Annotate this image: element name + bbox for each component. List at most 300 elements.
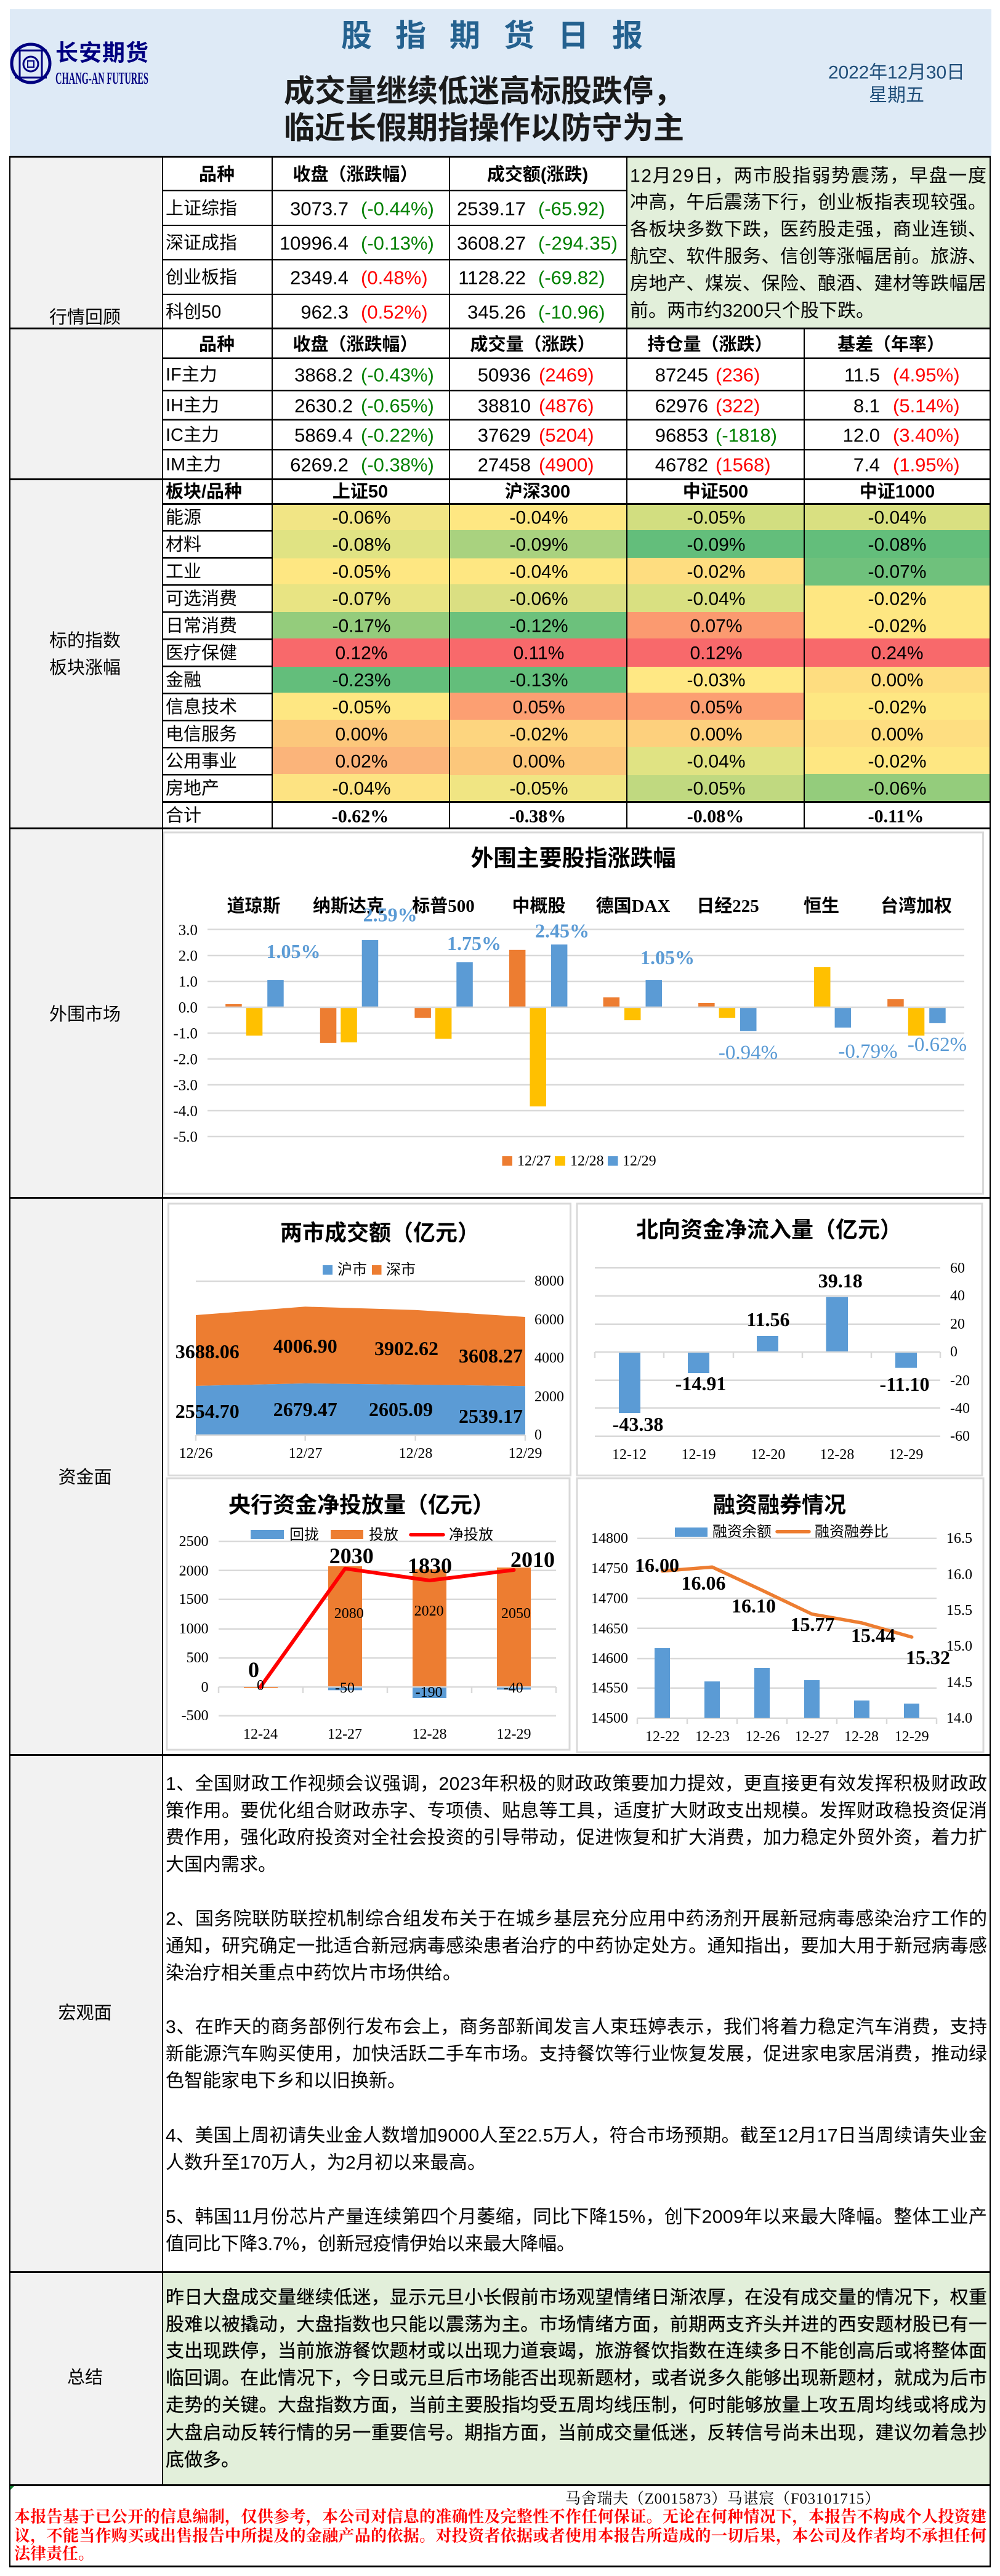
disclaimer: 本报告基于已公开的信息编制，仅供参考，本公司对信息的准确性及完整性不作任何保证。无论在何种情况下，本报告不构成个人投资建 (14, 2507, 986, 2527)
row: 创业板指: 创业板指 (166, 267, 237, 288)
row labels: sectors: 日常消费 (166, 616, 237, 636)
sector values: -0.02% (868, 589, 927, 610)
header row: futures: 持仓量（涨跌） (647, 334, 773, 355)
category labels: 中概股 (512, 896, 566, 916)
sector values: -0.06% (509, 589, 568, 610)
row: IH: (4876) (539, 395, 594, 416)
sector heat table (166, 481, 990, 826)
logo: Chang-An Futures (12, 41, 148, 87)
chart: northbound net inflow (577, 1204, 982, 1475)
axis labels: 12-27 (795, 1729, 829, 1745)
y axis labels: 1.0 (179, 974, 198, 990)
row: IF: (4.95%) (893, 364, 960, 385)
header row: spot: 品种 (199, 164, 235, 185)
data labels: 15.44 (851, 1624, 895, 1646)
row: IM: 7.4 (853, 454, 880, 475)
macro item 1: 1、全国财政工作视频会议强调，2023年积极的财政政策要加力提效，更直接更有效发挥积极财政政 (166, 1774, 987, 1794)
row: 上证综指: (-65.92) (538, 198, 605, 219)
axis labels (179, 1273, 564, 1462)
sector values: -0.05% (332, 697, 391, 718)
row labels: sectors: 可选消费 (166, 589, 237, 609)
axis labels: 4000 (534, 1350, 564, 1366)
left label column background (10, 156, 163, 2485)
data labels: 16.00 (635, 1554, 679, 1576)
date: 2022年12月30日 (828, 63, 965, 83)
data labels: 2554.70 (175, 1400, 240, 1422)
chart title: 两市成交额（亿元） (280, 1220, 480, 1245)
axis labels (612, 1260, 970, 1463)
row: 科创50: (-10.96) (538, 302, 605, 323)
axis labels: 40 (950, 1288, 965, 1304)
axis labels: 12-28 (413, 1726, 447, 1742)
axis labels: 2000 (179, 1563, 209, 1579)
legend: 12/27 (517, 1153, 551, 1169)
axis labels: 12-29 (496, 1726, 531, 1742)
sector values: -0.13% (509, 670, 568, 691)
sector values: 0.00% (871, 724, 924, 745)
area: Shenzhen (196, 1306, 525, 1386)
row: IM: (-0.38%) (361, 454, 434, 475)
section label: overseas markets: 外围市场 (49, 1004, 121, 1024)
axis labels: 8000 (534, 1273, 564, 1289)
axis labels: -500 (182, 1708, 209, 1724)
axis labels: 14500 (591, 1710, 628, 1726)
bars (244, 1566, 531, 1698)
section label: funds: 资金面 (58, 1467, 112, 1487)
logo: Chang-An Futures: 长安期货 (55, 41, 148, 65)
bars 12/27 (225, 950, 904, 1043)
bar labels: 2050 (501, 1606, 531, 1622)
area: Shanghai (196, 1383, 525, 1435)
row: IM: IM主力 (166, 454, 221, 475)
legend: 融资余额 (712, 1523, 772, 1540)
summary text: 走势的关键。大盘指数方面，当前主要股指均受五周均线压制，何时能够放量上攻五周均线或将成为 (166, 2395, 987, 2416)
axis labels: 12-29 (895, 1729, 929, 1745)
axis labels: 0 (534, 1427, 542, 1443)
totals row: -0.62% (332, 807, 389, 826)
futures table (166, 334, 960, 475)
data labels: 3902.62 (374, 1337, 438, 1359)
row labels: sectors: 能源 (166, 507, 201, 528)
macro item 4 (166, 2125, 987, 2173)
macro item 2: 2、国务院联防联控机制综合组发布关于在城乡基层充分应用中药汤剂开展新冠病毒感染治疗工作的 (166, 1909, 987, 1930)
row: IM: 46782 (655, 454, 708, 475)
sector values: 0.00% (690, 724, 743, 745)
macro item 2: 染治疗相关重点中药饮片市场供给。 (166, 1963, 461, 1984)
sector values: -0.04% (868, 507, 927, 528)
header row: futures: 收盘（涨跌幅） (292, 334, 418, 355)
row: 上证综指: 2539.17 (457, 198, 526, 219)
summary box (163, 2272, 990, 2484)
axis labels: 12/28 (399, 1446, 432, 1462)
sector values: -0.12% (509, 616, 568, 637)
chart title: 外围主要股指涨跌幅 (470, 846, 676, 871)
header row: sectors: 沪深300 (505, 481, 570, 502)
sector values: -0.04% (509, 507, 568, 528)
row: 深证成指 (166, 233, 618, 254)
macro text block (166, 1774, 987, 2255)
legend: 深市 (386, 1262, 416, 1278)
legend (502, 1153, 656, 1169)
y axis labels (173, 922, 198, 1145)
sector values: -0.08% (868, 534, 927, 555)
sector values: -0.06% (332, 507, 391, 528)
value labels 12/29: 1.75% (447, 932, 501, 954)
row: 创业板指: (0.48%) (361, 267, 428, 288)
header row: spot (199, 164, 588, 185)
header row: spot: 收盘（涨跌幅） (292, 164, 418, 185)
macro item 3: 色智能家电下乡和以旧换新。 (166, 2071, 406, 2091)
row: 深证成指: 10996.4 (280, 233, 349, 254)
data labels (613, 1270, 929, 1435)
sector values: 0.24% (871, 643, 924, 664)
sector values (332, 507, 927, 799)
bars 12/29 (267, 940, 946, 1031)
chart: PBOC net injection (167, 1478, 570, 1750)
sector values: 0.00% (335, 724, 388, 745)
axis labels: 12-27 (328, 1726, 362, 1742)
spot index table (166, 164, 618, 323)
row: IC: 12.0 (843, 425, 880, 446)
chart title: 融资融券情况 (713, 1492, 846, 1517)
legend: 沪市 (337, 1262, 367, 1278)
sector values: -0.06% (868, 778, 927, 799)
header row: sectors: 中证500 (683, 481, 748, 502)
macro item 5 (166, 2207, 987, 2255)
axis labels: 500 (187, 1650, 209, 1666)
section label: summary: 总结 (67, 2367, 103, 2388)
row: IM: 6269.2 (290, 454, 349, 475)
category labels: 日经225 (696, 896, 759, 916)
disclaimer: 议，不能当作购买或出售报告中所提及的金融产品的依据。对投资者依据或者使用本报告所造成的一切后果，本公司及作者均不承担任何 (14, 2527, 986, 2545)
headline: 临近长假期指操作以防守为主 (284, 111, 684, 145)
logo: Chang-An Futures: CHANG-AN FUTURES (55, 69, 148, 87)
data labels: 4006.90 (273, 1335, 337, 1357)
row labels: sectors: 医疗保健 (166, 643, 237, 663)
data labels: -43.38 (613, 1413, 663, 1435)
row: IC (166, 425, 960, 446)
bar labels: -50 (335, 1680, 355, 1696)
axis labels: 2500 (179, 1534, 209, 1550)
sector values: -0.05% (332, 561, 391, 582)
row: 创业板指: (-69.82) (538, 267, 605, 288)
axis labels: 60 (950, 1260, 965, 1276)
chart: overseas index moves (164, 832, 983, 1194)
summary text (166, 2288, 987, 2470)
data labels: 3608.27 (459, 1345, 523, 1367)
axis labels: 15.5 (946, 1603, 972, 1619)
row: 上证综指: (-0.44%) (361, 198, 434, 219)
data labels: 3688.06 (175, 1340, 240, 1362)
date: 星期五 (869, 85, 924, 106)
sector values: -0.08% (332, 534, 391, 555)
summary text: 临回调。在此情况下，今日或元旦后市场能否出现新题材，或者说多久能够出现新题材，就成为后市 (166, 2368, 987, 2389)
sector values: -0.05% (509, 778, 568, 799)
row: IF: 87245 (655, 364, 708, 385)
net labels: 2030 (329, 1544, 374, 1568)
axis labels: 14600 (591, 1651, 628, 1667)
macro item 1: 策作用。要优化组合财政赤字、专项债、贴息等工具，适度扩大财政支出规模。发挥财政稳投资促消 (166, 1801, 987, 1821)
axis labels: 15.0 (946, 1638, 972, 1654)
row: IC: (-0.22%) (361, 425, 434, 446)
sector values: -0.04% (332, 778, 391, 799)
row: 科创50: 科创50 (166, 302, 221, 322)
row: 科创50: 345.26 (467, 302, 526, 323)
row: IF: 50936 (478, 364, 531, 385)
bar labels: -40 (504, 1680, 523, 1696)
macro item 5: 值同比下降3.7%，创新冠疫情伊始以来最大降幅。 (166, 2234, 575, 2255)
macro item 5: 5、韩国11月份芯片产量连续第四个月萎缩，同比下降15%，创下2009年以来最大降幅。整体工业产 (166, 2207, 987, 2228)
axis labels: 2000 (534, 1389, 564, 1405)
chart title: 北向资金净流入量（亿元） (636, 1217, 902, 1242)
row: IC: 96853 (655, 425, 708, 446)
row: IF: (236) (716, 364, 760, 385)
y axis labels: 0.0 (179, 1000, 198, 1016)
summary text: 大盘启动反转行情的另一重要信号。期指方面，当前成交量低迷，反转信号尚未出现，建议勿着急抄 (166, 2423, 987, 2443)
axis labels: 14650 (591, 1621, 628, 1637)
row: IH: 2630.2 (294, 395, 353, 416)
macro item 2: 通知，研究确定一批适合新冠病毒感染患者治疗的中药协定处方。通知指出，要加大用于新冠病毒感 (166, 1936, 987, 1957)
row: IH: 62976 (655, 395, 708, 416)
bar labels: 0 (257, 1678, 264, 1694)
net labels: 1830 (408, 1553, 452, 1578)
sector values: 0.05% (512, 697, 565, 718)
data labels: 39.18 (818, 1270, 863, 1292)
axis labels: 16.0 (946, 1567, 972, 1583)
y axis labels: -5.0 (173, 1129, 198, 1145)
summary text: 昨日大盘成交量继续低迷，显示元旦小长假前市场观望情绪日渐浓厚，在没有成交量的情况下，权重 (166, 2288, 987, 2308)
y axis labels: 2.0 (179, 948, 198, 964)
row: 深证成指: 深证成指 (166, 233, 237, 253)
axis labels: 14800 (591, 1531, 628, 1547)
row: IH (166, 395, 960, 416)
chart: margin financing (577, 1478, 983, 1752)
sector values: 0.12% (690, 643, 743, 664)
row labels: sectors: 公用事业 (166, 751, 237, 771)
axis labels: 12-22 (645, 1729, 680, 1745)
data labels: 16.06 (681, 1572, 725, 1594)
disclaimer (14, 2507, 986, 2562)
market commentary box: 各板块多数下跌，医药股走强，商业连锁、 (630, 219, 986, 240)
sector values: 0.11% (514, 643, 564, 664)
sector values: -0.09% (509, 534, 568, 555)
row: IM: 27458 (478, 454, 531, 475)
row: IM: (4900) (539, 454, 594, 475)
category labels: 道琼斯 (227, 896, 281, 916)
row: IM (166, 454, 960, 475)
data labels: 2605.09 (369, 1398, 433, 1420)
net labels (248, 1544, 555, 1682)
axis labels: 12-23 (695, 1729, 730, 1745)
row: IC: 5869.4 (294, 425, 353, 446)
headline: 成交量继续低迷高标股跌停， (284, 74, 684, 108)
row labels: sectors: 材料 (166, 534, 201, 555)
axis labels: 6000 (534, 1312, 564, 1328)
data labels: 11.56 (746, 1308, 790, 1330)
sector values: -0.09% (687, 534, 746, 555)
sector values: -0.02% (687, 561, 746, 582)
axis labels: 12-20 (751, 1447, 785, 1463)
value labels 12/29: 1.05% (640, 946, 695, 968)
heat map cells (272, 504, 990, 802)
axis labels: 12-26 (745, 1729, 780, 1745)
axis labels: 0 (201, 1680, 209, 1696)
sector values: 0.07% (690, 616, 743, 637)
y axis labels: -2.0 (173, 1052, 198, 1068)
macro item 2 (166, 1909, 987, 1984)
sector values: -0.02% (868, 616, 927, 637)
data labels: 2539.17 (459, 1405, 523, 1427)
date (828, 63, 965, 106)
legend (675, 1523, 889, 1540)
sector values: -0.05% (687, 507, 746, 528)
macro item 1: 大国内需求。 (166, 1854, 276, 1875)
axis labels: -60 (950, 1428, 970, 1444)
headline (284, 74, 684, 145)
axis labels: 12-28 (820, 1447, 854, 1463)
row: IF: IF主力 (166, 364, 217, 385)
axis labels: 0 (950, 1344, 958, 1360)
row labels: sectors (166, 507, 237, 826)
macro item 4: 人数升至170万人，为2月初以来最高。 (166, 2152, 486, 2173)
bar labels: 2080 (334, 1606, 364, 1622)
sector values: -0.02% (868, 697, 927, 718)
axis labels: 1500 (179, 1592, 209, 1608)
axis labels: 14550 (591, 1680, 628, 1696)
header row: futures: 品种 (199, 334, 235, 355)
sector values: 0.12% (335, 643, 388, 664)
value labels 12/29: 1.05% (266, 940, 320, 962)
section label: macro: 宏观面 (58, 2003, 112, 2023)
row: IC: IC主力 (166, 425, 219, 445)
header row: sectors: 板块/品种 (166, 481, 242, 502)
sector values: -0.04% (509, 561, 568, 582)
header row: sectors: 中证1000 (860, 481, 935, 502)
axis labels (591, 1531, 972, 1745)
sector values: -0.04% (687, 751, 746, 772)
legend: 回拢 (289, 1527, 319, 1543)
row labels: sectors: 合计 (166, 805, 201, 826)
row: IH: 8.1 (853, 395, 880, 416)
row labels: sectors: 金融 (166, 670, 201, 690)
legend: 融资融券比 (815, 1523, 889, 1540)
macro item 4: 4、美国上周初请失业金人数增加9000人至22.5万人，符合市场预期。截至12月17日当周续请失业金 (166, 2125, 987, 2146)
axis labels: 12/29 (509, 1446, 542, 1462)
axis labels: 12-28 (844, 1729, 879, 1745)
summary text: 股难以被撬动，大盘指数也只能以震荡为主。市场情绪方面，前期两支齐头并进的西安题材股已有一 (166, 2315, 987, 2335)
row: IH: IH主力 (166, 395, 219, 416)
sector values: 0.02% (335, 751, 388, 772)
data labels: -11.10 (880, 1373, 929, 1395)
category labels: 台湾加权 (881, 895, 952, 916)
legend: 12/28 (570, 1153, 604, 1169)
legend: 投放 (369, 1527, 398, 1543)
axis labels: 14700 (591, 1591, 628, 1607)
category labels (227, 895, 952, 916)
macro item 1: 费作用，强化政府投资对全社会投资的引导带动，促进恢复和扩大消费，加力稳定外贸外资，着力扩 (166, 1827, 987, 1848)
row: 深证成指: (-294.35) (538, 233, 618, 254)
market commentary box: 前。两市约3200只个股下跌。 (630, 300, 874, 321)
market commentary box: 冲高，午后震荡下行，创业板指表现较强。 (630, 192, 986, 213)
section label: market review: 行情回顾 (49, 307, 121, 328)
totals row (332, 807, 924, 826)
row: 科创50: (0.52%) (361, 302, 428, 323)
row: 科创50: 962.3 (300, 302, 349, 323)
market commentary box: 航空、软件服务、信创等涨幅居前。旅游、 (630, 246, 986, 267)
data labels (635, 1554, 950, 1668)
bars (655, 1648, 919, 1718)
macro item 1 (166, 1774, 987, 1875)
axis labels (179, 1534, 531, 1742)
axis labels: -40 (950, 1401, 970, 1417)
section label: index sector moves: 标的指数 (49, 630, 121, 651)
market commentary box: 房地产、煤炭、保险、酿酒、建材等跌幅居 (630, 273, 986, 294)
axis labels: 1000 (179, 1621, 209, 1637)
bars (619, 1297, 917, 1413)
axis labels: 12-12 (612, 1447, 647, 1463)
totals row: -0.08% (687, 807, 744, 826)
category labels: 标普500 (412, 896, 475, 916)
row labels: sectors: 电信服务 (166, 724, 237, 744)
sector values: -0.07% (332, 589, 391, 610)
row: 上证综指: 上证综指 (166, 198, 237, 219)
bar labels (257, 1603, 531, 1701)
net labels: 0 (248, 1657, 259, 1682)
header band (10, 9, 991, 156)
axis labels: 12-24 (243, 1726, 278, 1742)
macro item 3: 新能源汽车购买使用，加快活跃二手车市场。支持餐饮等行业恢复发展，促进家电家居消费，推动绿 (166, 2044, 987, 2064)
row: IC: (-1818) (716, 425, 777, 446)
row: 深证成指: (-0.13%) (361, 233, 434, 254)
sector values: -0.07% (868, 561, 927, 582)
row: IH: (322) (716, 395, 760, 416)
bar labels: -190 (416, 1684, 443, 1701)
axis labels: 12-19 (681, 1447, 716, 1463)
sector values: -0.02% (509, 724, 568, 745)
header row: sectors: 上证50 (333, 481, 388, 502)
value labels 12/29: -0.62% (908, 1034, 967, 1056)
axis labels: 14.0 (946, 1710, 972, 1726)
net labels: 2010 (510, 1547, 555, 1572)
value labels 12/29: -0.94% (719, 1042, 778, 1064)
summary text: 支出现跌停，当前旅游餐饮题材或以出现力道衰竭，旅游餐饮指数在连续多日不能创高后或将整体面 (166, 2341, 987, 2362)
y axis labels: -4.0 (173, 1103, 198, 1119)
bars 12/28 (246, 967, 924, 1106)
value labels 12/29: -0.79% (838, 1040, 898, 1063)
y axis labels: -1.0 (173, 1026, 198, 1042)
market commentary box (627, 157, 990, 328)
footer (10, 2486, 986, 2562)
row labels: sectors: 房地产 (166, 778, 219, 799)
row: IC: 37629 (478, 425, 531, 446)
value labels 12/29 (266, 904, 967, 1064)
legend: 净投放 (449, 1527, 493, 1543)
category labels: 恒生 (804, 896, 839, 916)
category labels: 德国DAX (596, 896, 670, 916)
row: IM: (1.95%) (893, 454, 960, 475)
row: IH: (5.14%) (893, 395, 960, 416)
chart: market turnover (169, 1204, 570, 1475)
data labels (175, 1335, 523, 1427)
row labels: sectors: 信息技术 (166, 697, 237, 717)
data labels: 16.10 (732, 1595, 776, 1617)
value labels 12/29: 2.45% (535, 920, 589, 942)
axis labels: 16.5 (946, 1531, 972, 1547)
axis labels: 20 (950, 1316, 965, 1332)
row labels: sectors: 工业 (166, 562, 201, 582)
row: IC: (5204) (539, 425, 594, 446)
sector values: 0.00% (512, 751, 565, 772)
